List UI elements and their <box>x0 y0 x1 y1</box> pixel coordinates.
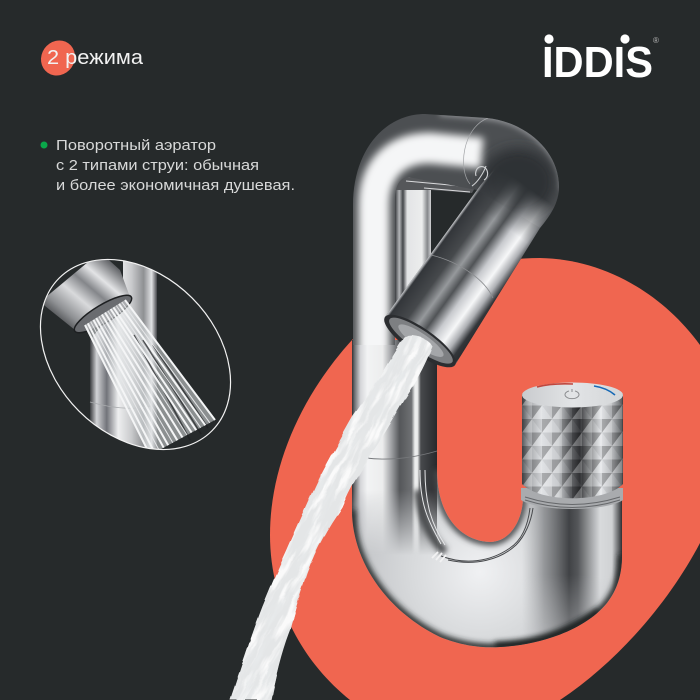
inset dark area <box>90 260 123 340</box>
heading text: 2 режима <box>47 47 144 69</box>
aerator nozzle <box>395 320 447 362</box>
power icon <box>565 389 579 399</box>
water body <box>230 336 433 700</box>
knob diamond pattern <box>522 394 623 498</box>
description line 1: Поворотный аэратор <box>56 137 216 154</box>
spout under-fill <box>385 190 540 365</box>
description line 3: и более экономичная душевая. <box>56 177 295 194</box>
inset outline <box>3 222 268 487</box>
water stream <box>230 335 432 700</box>
arch right dark <box>480 148 556 216</box>
small clip detail <box>432 552 446 562</box>
heading blob <box>34 34 82 82</box>
faucet <box>340 108 630 660</box>
description line 2: с 2 типами струи: обычная <box>56 157 259 174</box>
logo dot left <box>544 34 554 44</box>
logo: iDDIS <box>542 34 659 87</box>
inset aerator body <box>44 260 129 329</box>
vertical body <box>352 340 437 552</box>
logo dot right <box>620 34 630 44</box>
bullet <box>40 142 48 148</box>
body seam <box>366 451 437 459</box>
back pipe <box>395 172 431 328</box>
logo word: IDDIS <box>542 38 653 87</box>
aerator ring <box>384 311 458 370</box>
inset content <box>44 260 216 449</box>
coral blob <box>270 258 700 700</box>
knob side <box>522 394 623 498</box>
collar ribs <box>525 497 620 508</box>
arch seam <box>464 118 488 184</box>
spray jets <box>85 300 215 455</box>
lower body J <box>352 340 622 648</box>
aerator rim <box>378 306 462 376</box>
upper arch <box>353 114 559 345</box>
inset: shower spray close-up <box>40 258 232 450</box>
inner U shade <box>437 470 523 542</box>
spray haze <box>85 300 215 455</box>
hot mark <box>537 384 573 387</box>
bottom dark rim <box>495 612 600 647</box>
crease lines <box>420 470 445 545</box>
cold mark <box>594 386 615 395</box>
thin bar highlight <box>406 181 472 192</box>
inset pipe seam <box>90 402 150 408</box>
outer dark edge <box>352 510 622 647</box>
water light mottling <box>230 335 430 700</box>
thin bar under arch <box>395 177 477 193</box>
knob collar <box>521 488 623 509</box>
registered mark: ® <box>653 36 659 45</box>
aerator face <box>378 306 462 376</box>
text block: description <box>40 137 295 194</box>
water texture <box>230 335 430 700</box>
arch base <box>345 108 565 348</box>
heading: 2 режима <box>34 34 144 82</box>
spout <box>385 172 552 365</box>
knob <box>521 382 623 509</box>
inset aerator rim <box>74 294 132 334</box>
spout seam <box>431 255 493 298</box>
right column shading <box>522 497 622 637</box>
under-bend lines <box>441 508 533 562</box>
water shadow mottling <box>234 336 428 688</box>
inset pipe <box>90 261 157 448</box>
arch highlight <box>374 148 482 420</box>
bowl <box>352 472 622 648</box>
knob cap <box>522 382 623 408</box>
spray jets thin <box>91 302 210 450</box>
arch outer rim light <box>440 110 565 190</box>
spray dark gaps <box>134 335 208 440</box>
crease dark <box>418 490 445 552</box>
arch swirl detail <box>472 166 488 186</box>
